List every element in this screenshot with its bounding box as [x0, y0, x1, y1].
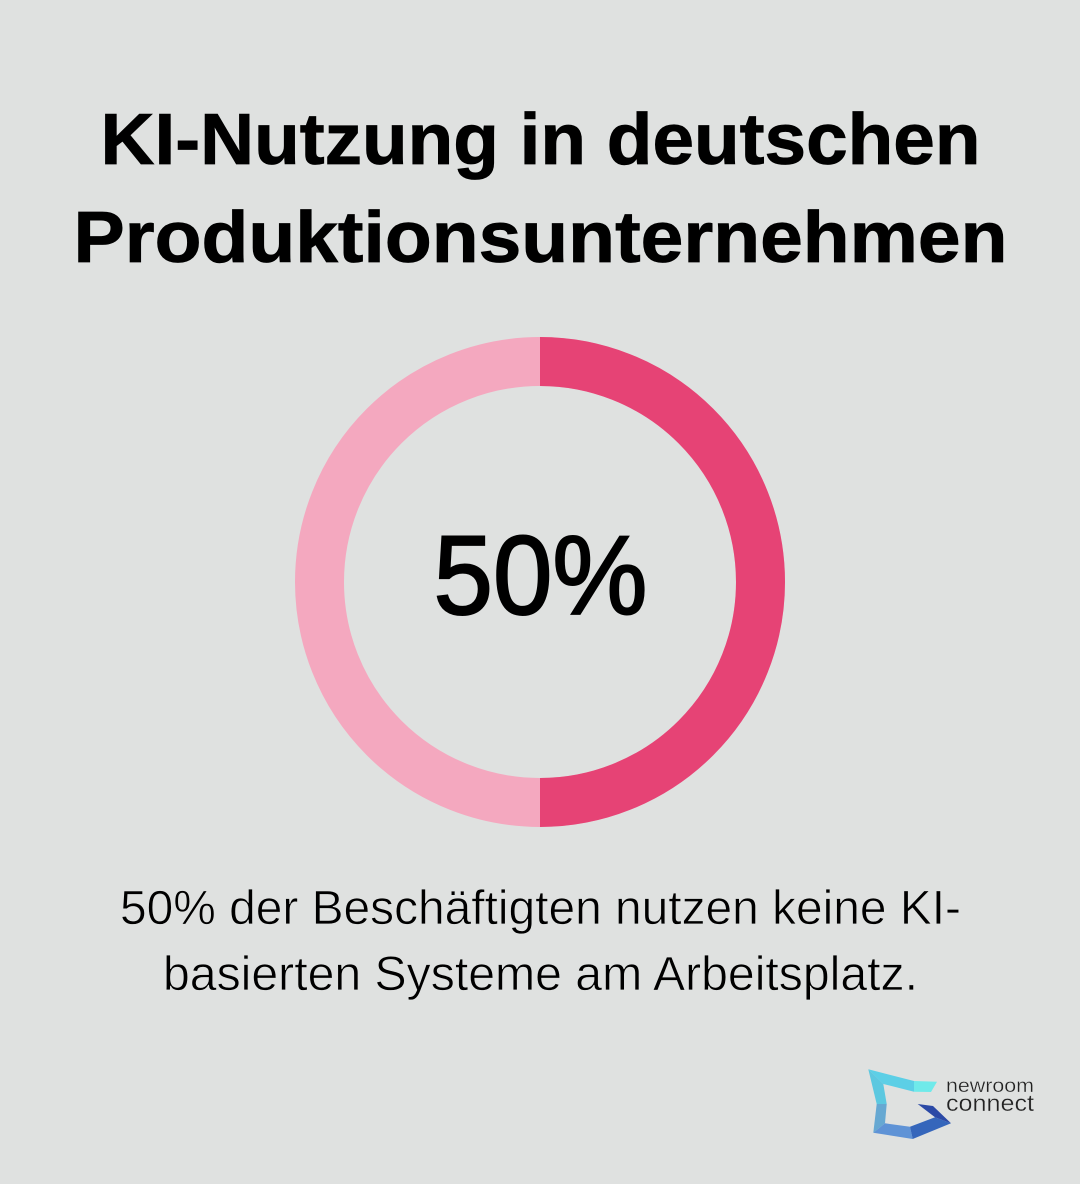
logo wordmark: newroom: [946, 1076, 1034, 1097]
icon: logo mark: [868, 1069, 951, 1139]
description text: [120, 882, 961, 1001]
logo wordmark: connect: [946, 1090, 1035, 1116]
title: KI-Nutzung in deutschen: [100, 100, 980, 180]
title: Produktionsunternehmen: [74, 198, 1008, 278]
logo wordmark: [946, 1076, 1035, 1116]
description text: 50% der Beschäftigten nutzen keine KI-: [120, 882, 961, 935]
donut chart: 50%: [320, 362, 760, 802]
title: [74, 100, 1008, 278]
logo: newroom connect: [868, 1069, 1035, 1139]
description text: basierten Systeme am Arbeitsplatz.: [163, 948, 918, 1001]
center value: 50%: [434, 513, 648, 638]
